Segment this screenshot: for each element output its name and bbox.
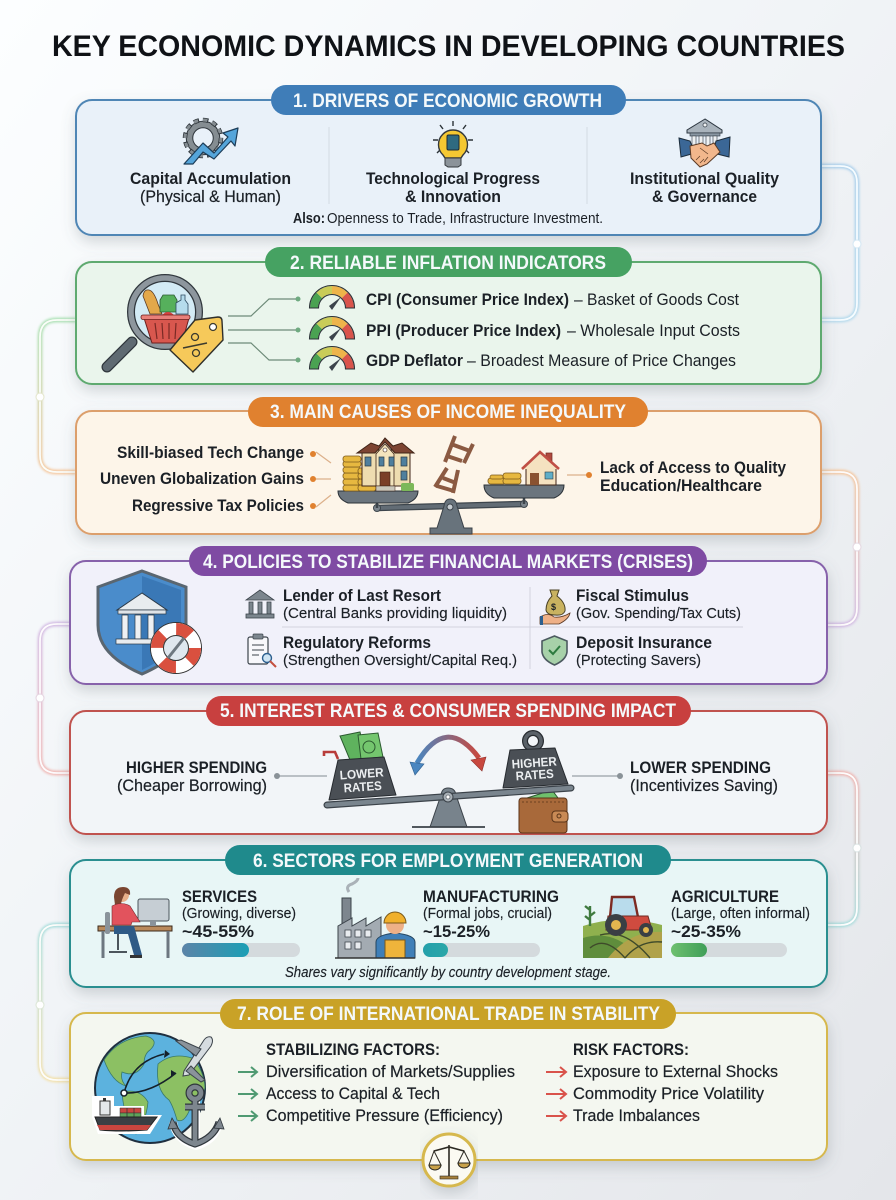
policy: fiscal stimulus: $: [551, 602, 556, 612]
heading 3: 3. MAIN CAUSES OF INCOME INEQUALITY: [270, 401, 626, 423]
sector: agriculture: ~25-35%: [671, 922, 741, 941]
text: institutional quality: [630, 169, 780, 206]
icon: institution and handshake: [679, 119, 730, 167]
list: stabilizing factors: Diversification of Markets/Supplies: [266, 1062, 515, 1081]
policy: lender of last resort: [246, 586, 507, 622]
sector: manufacturing: MANUFACTURING: [423, 887, 559, 906]
list: risk factors: [546, 1040, 778, 1125]
icon: seesaw with rates: HIGHER: [511, 754, 557, 772]
policy: deposit insurance: [542, 633, 712, 669]
label: higher spending: HIGHER SPENDING: [126, 758, 267, 777]
connector: panel 3 to panel 4: [820, 472, 861, 625]
icon: seesaw with rates: [324, 732, 571, 833]
icon: light bulb with chip: [433, 121, 473, 167]
icon: shield with bank and lifebuoy: [98, 571, 202, 674]
sector: manufacturing: ~15-25%: [423, 922, 490, 941]
icon: gauge gdp: [310, 346, 354, 371]
panel 7: role of international trade in stability: [70, 999, 827, 1186]
list: stabilizing factors: [238, 1040, 515, 1125]
heading 4: 4. POLICIES TO STABILIZE FINANCIAL MARKETS (CRISES): [203, 551, 693, 573]
panel 3: main causes of income inequality: [76, 397, 821, 534]
connector: panel 4 to panel 5: [36, 624, 71, 773]
sector: services: (Growing, diverse): [182, 905, 296, 922]
icon: gauge ppi: [310, 316, 354, 341]
heading 5: [206, 696, 691, 726]
panel 4: policies to stabilize financial markets: [70, 546, 827, 684]
education label: Education/Healthcare: [600, 476, 762, 495]
note: also: Also:: [293, 211, 325, 227]
icon: factory and worker: [335, 878, 415, 958]
heading 6: [225, 845, 671, 875]
list: stabilizing factors: Access to Capital & Tech: [266, 1084, 440, 1103]
text: technological progress: Technological Progress: [366, 169, 540, 188]
causes list: Regressive Tax Policies: [132, 496, 304, 515]
indicator: cpi: – Basket of Goods Cost: [574, 290, 739, 309]
list: risk factors: Trade Imbalances: [573, 1106, 700, 1125]
list: stabilizing factors: STABILIZING FACTORS:: [266, 1040, 440, 1059]
panel 1: drivers of economic growth: [76, 85, 821, 235]
causes list: Uneven Globalization Gains: [100, 469, 304, 488]
text: technological progress: [366, 169, 540, 206]
icon: inequality scale: [338, 436, 564, 534]
indicator: ppi: PPI (Producer Price Index): [366, 321, 561, 340]
policy: deposit insurance: Deposit Insurance: [576, 633, 712, 652]
sector: manufacturing: (Formal jobs, crucial): [423, 905, 552, 922]
heading 5: 5. INTEREST RATES & CONSUMER SPENDING IMPACT: [220, 700, 676, 722]
heading 3: [248, 397, 648, 427]
connector: panel 5 to panel 6: [826, 773, 861, 925]
label: higher spending: (Cheaper Borrowing): [117, 777, 267, 795]
heading 2: 2. RELIABLE INFLATION INDICATORS: [290, 252, 606, 274]
policy: lender of last resort: Lender of Last Resort: [283, 586, 441, 605]
panel 6: sectors for employment generation: [70, 845, 827, 987]
connector: panel 6 to panel 7: [36, 925, 71, 1080]
text: institutional quality: Institutional Quality: [630, 169, 780, 188]
sector: agriculture: [671, 887, 810, 957]
heading 7: [220, 999, 676, 1029]
panel 5: interest rates and consumer spending: [70, 696, 827, 834]
icon: tractor and fields: [583, 897, 662, 958]
icon: globe, plane, ship and anchor: [92, 1033, 224, 1146]
indicator: cpi: CPI (Consumer Price Index): [366, 290, 569, 309]
education label: [567, 458, 786, 495]
text: capital accumulation: Capital Accumulation: [130, 169, 291, 188]
title: KEY ECONOMIC DYNAMICS IN DEVELOPING COUNTRIES: [52, 30, 845, 63]
icon: magnifier with basket and price tag: [107, 278, 223, 372]
list: risk factors: Exposure to External Shocks: [573, 1062, 778, 1081]
icon: seesaw with rates: LOWER: [339, 765, 384, 783]
text: capital accumulation: [130, 169, 291, 206]
education label: Lack of Access to Quality: [600, 458, 786, 477]
sector: agriculture: AGRICULTURE: [671, 887, 779, 906]
icon: gauge cpi: [310, 286, 354, 310]
label: lower spending: LOWER SPENDING: [630, 758, 771, 777]
sector: agriculture: (Large, often informal): [671, 905, 810, 922]
list: stabilizing factors: Competitive Pressure (Efficiency): [266, 1106, 503, 1125]
label: higher spending: [117, 758, 327, 795]
heading 4: [189, 546, 707, 576]
icon: gear and rising arrow: [184, 120, 238, 164]
connector: panel 2 to panel 3: [36, 320, 76, 472]
policy: deposit insurance: (Protecting Savers): [576, 652, 701, 669]
policy: regulatory reforms: [248, 633, 517, 669]
connector lines to gauges: [228, 296, 300, 362]
heading 2: [265, 247, 632, 277]
policy: fiscal stimulus: [540, 586, 741, 625]
policy: lender of last resort: (Central Banks providing liquidity): [283, 605, 507, 622]
policy: fiscal stimulus: (Gov. Spending/Tax Cuts): [576, 605, 741, 622]
heading 7: 7. ROLE OF INTERNATIONAL TRADE IN STABILITY: [237, 1003, 660, 1025]
icon: balance badge: [423, 1134, 475, 1186]
list: risk factors: RISK FACTORS:: [573, 1040, 689, 1059]
heading 6: 6. SECTORS FOR EMPLOYMENT GENERATION: [253, 850, 643, 872]
indicator: gdp deflator: GDP Deflator: [366, 351, 463, 370]
text: capital accumulation: (Physical & Human): [140, 188, 281, 206]
icon: office worker: [98, 887, 172, 958]
sector: services: [182, 887, 300, 957]
note: shares vary: Shares vary significantly by country development stage.: [285, 964, 611, 981]
label: lower spending: (Incentivizes Saving): [630, 777, 778, 795]
label: lower spending: [572, 758, 778, 795]
policy: regulatory reforms: (Strengthen Oversight/Capital Req.): [283, 652, 517, 669]
sector: manufacturing: [423, 887, 559, 957]
note: also: Openness to Trade, Infrastructure Investment.: [327, 211, 603, 227]
sector: services: SERVICES: [182, 887, 257, 906]
panel 2: reliable inflation indicators: [76, 247, 821, 384]
heading 1: [271, 85, 626, 115]
indicator: gdp deflator: – Broadest Measure of Price Changes: [467, 351, 736, 370]
list: risk factors: Commodity Price Volatility: [573, 1084, 764, 1103]
policy: fiscal stimulus: Fiscal Stimulus: [576, 586, 689, 605]
causes list: [100, 443, 331, 515]
indicator: ppi: – Wholesale Input Costs: [567, 321, 740, 340]
heading 1: 1. DRIVERS OF ECONOMIC GROWTH: [293, 90, 602, 112]
sector: services: ~45-55%: [182, 922, 254, 941]
policy: regulatory reforms: Regulatory Reforms: [283, 633, 431, 652]
causes list: Skill-biased Tech Change: [117, 443, 304, 462]
icon: seesaw with rates: RATES: [515, 767, 554, 783]
text: technological progress: & Innovation: [405, 187, 501, 206]
text: institutional quality: & Governance: [652, 187, 757, 206]
connector: panel 1 to panel 2: [820, 166, 861, 320]
icon: seesaw with rates: RATES: [343, 779, 382, 795]
